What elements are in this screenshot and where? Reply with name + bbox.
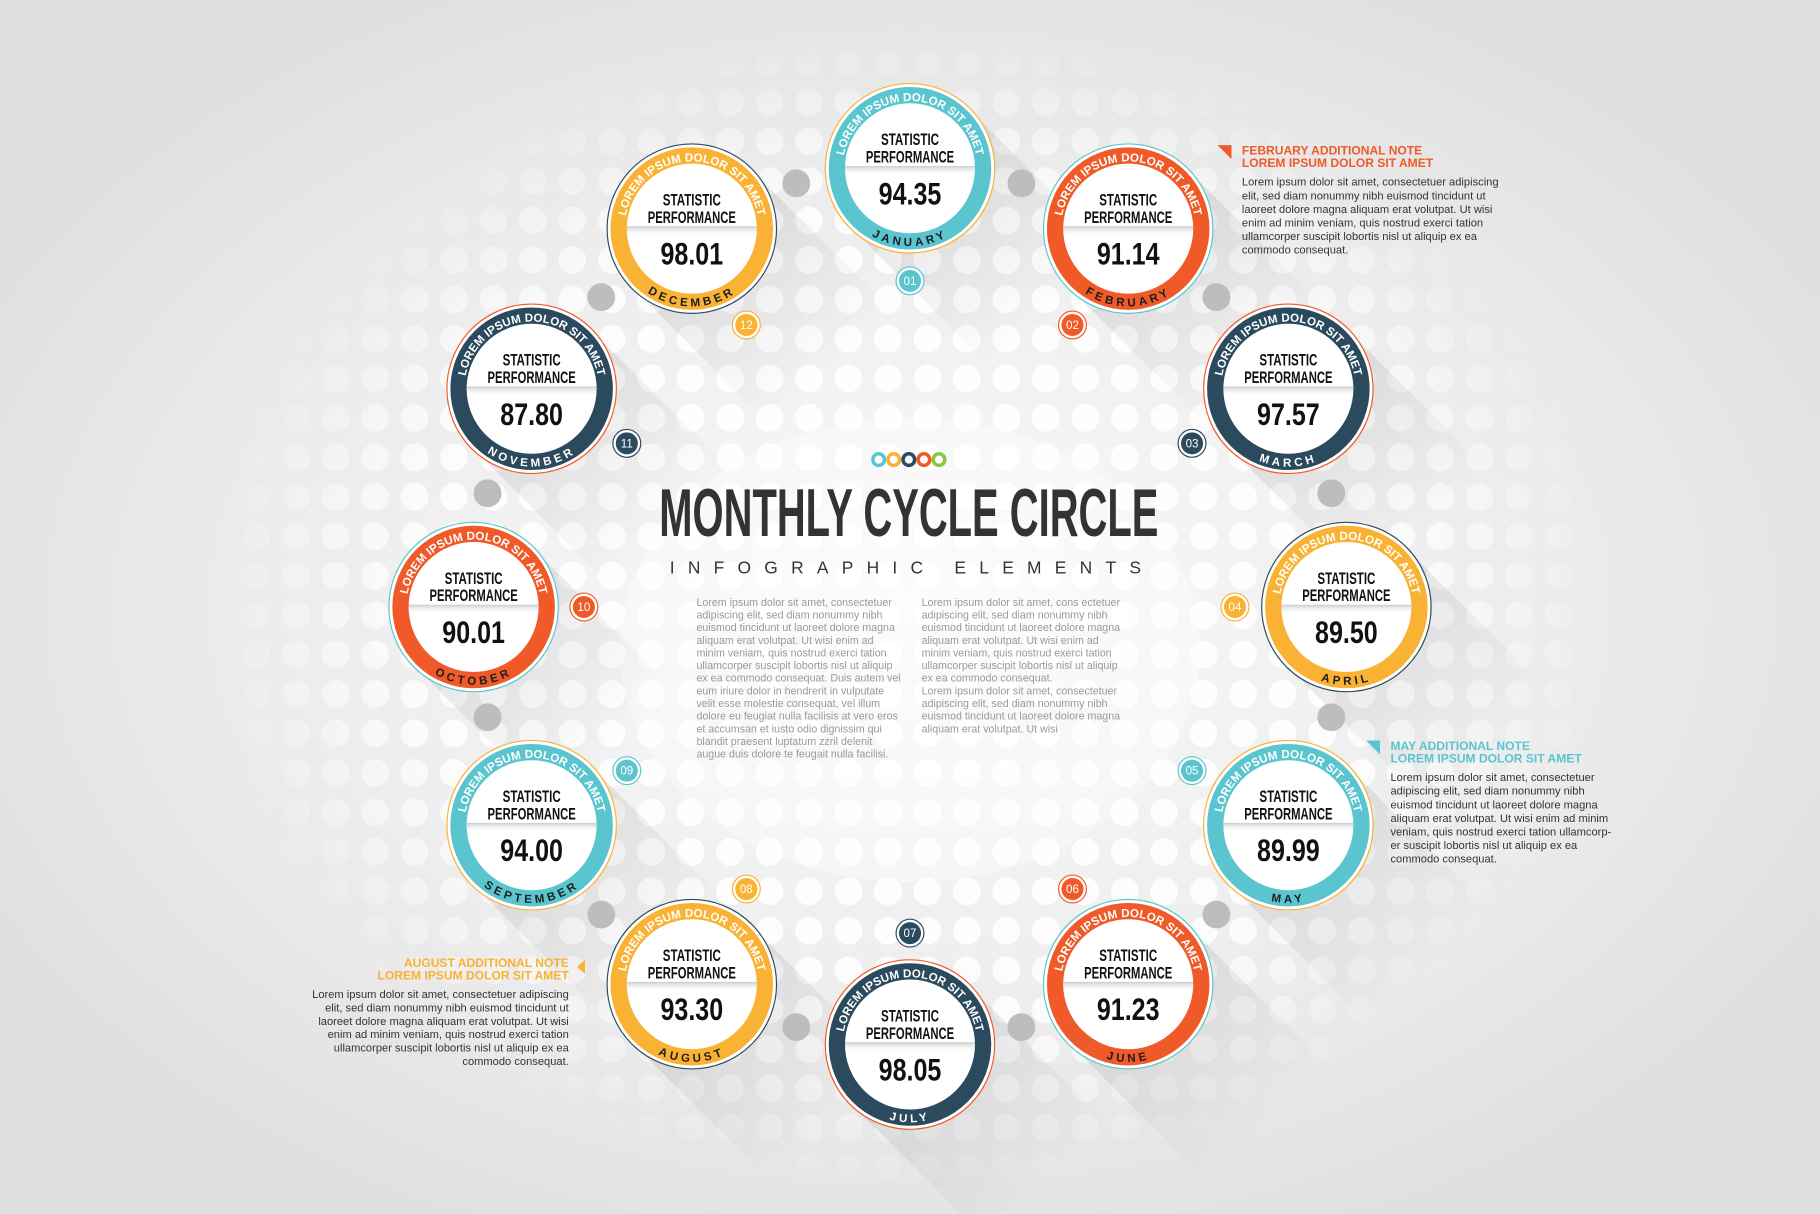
body text: left column: augue duis dolore te feugait nulla facilisi. [696, 749, 888, 761]
note: August [312, 956, 585, 1068]
note: February: FEBRUARY ADDITIONAL NOTE [1242, 143, 1422, 157]
circle: March: PERFORMANCE [1244, 369, 1333, 387]
circle: April: 89.50 [1315, 615, 1378, 650]
body text: right column: aliquam erat volutpat. Ut wisi [922, 723, 1058, 735]
body text: left column: ex ea commodo consequat. Duis autem vel [696, 673, 901, 685]
note: February: enim ad minim veniam, quis nostrud exerci tation [1242, 217, 1483, 229]
note: February: Lorem ipsum dolor sit amet, consectetuer adipiscing [1242, 177, 1499, 189]
note: May: aliquam erat volutpat. Ut wisi enim ad minim [1390, 813, 1608, 825]
circle: July: LOREM IPSUM DOLOR SIT AMET [836, 969, 984, 1032]
circle: September: STATISTIC [503, 788, 561, 806]
body text: left column: blandit praesent luptatum zzril delenit [696, 736, 872, 748]
body text: left column: euismod tincidunt ut laoreet dolore magna [696, 622, 895, 634]
circle: September [446, 740, 617, 910]
circle: September: SEPTEMBER [484, 881, 577, 903]
circle: May [1203, 740, 1374, 910]
circle: June: PERFORMANCE [1084, 964, 1172, 982]
note: May: MAY ADDITIONAL NOTE [1390, 739, 1530, 753]
circle: July: STATISTIC [881, 1007, 939, 1025]
circle: July: PERFORMANCE [866, 1025, 954, 1043]
body text: left column: velit esse molestie consequat, vel illum [696, 698, 880, 710]
note: August: enim ad minim veniam, quis nostrud exerci tation [328, 1029, 569, 1041]
note: February [1218, 143, 1499, 257]
body text: left column: eum iriure dolor in hendrerit in vulputate [696, 685, 884, 697]
circle: January: 94.35 [879, 176, 941, 211]
circle: March [1203, 304, 1374, 474]
circle: March: STATISTIC [1259, 352, 1318, 370]
circle: November: STATISTIC [503, 352, 561, 370]
note: May: LOREM IPSUM DOLOR SIT AMET [1390, 752, 1582, 766]
circle: August: PERFORMANCE [648, 964, 736, 982]
body text: right column: Lorem ipsum dolor sit amet, consectetuer [922, 685, 1118, 697]
circle: July: 98.05 [879, 1053, 941, 1088]
circle: June [1042, 898, 1214, 1070]
body text: left column: ullamcorper suscipit lobortis nisl ut aliquip [696, 660, 893, 672]
body text: left column: minim veniam, quis nostrud exerci tation [696, 647, 887, 659]
circle: June: JUNE [1106, 1052, 1146, 1062]
circle: August: AUGUST [658, 1048, 720, 1062]
number badges: 10 [577, 601, 590, 614]
circle: April: LOREM IPSUM DOLOR SIT AMET [1272, 532, 1420, 594]
gray connector dots [474, 169, 1345, 1041]
note: February: laoreet dolore magna aliquam erat volutpat. Ut wisi [1242, 204, 1492, 216]
note: February: LOREM IPSUM DOLOR SIT AMET [1242, 156, 1434, 170]
circle: January: LOREM IPSUM DOLOR SIT AMET [836, 93, 984, 155]
circle: June: STATISTIC [1099, 947, 1157, 965]
body text: right column: ullamcorper suscipit lobortis nisl ut aliquip [922, 660, 1118, 672]
number badges: 12 [740, 319, 753, 332]
note: August: AUGUST ADDITIONAL NOTE [404, 956, 569, 970]
circle: March: MARCH [1260, 454, 1314, 467]
circle: January: JANUARY [872, 230, 942, 246]
body text: left column: dolore eu feugiat nulla facilisis at vero eros [696, 711, 898, 723]
note: May: veniam, quis nostrud exerci tation ullamcorp- [1390, 826, 1612, 838]
circle: October: 90.01 [442, 615, 505, 650]
number badges: 11 [621, 437, 633, 450]
number badges: 02 [1066, 319, 1079, 332]
subtitle: INFOGRAPHIC ELEMENTS [670, 557, 1141, 577]
body text: right column: aliquam erat volutpat. Ut wisi enim ad [922, 635, 1099, 647]
circle: November: LOREM IPSUM DOLOR SIT AMET [458, 314, 606, 376]
body text: right column: ex ea commodo consequat. [922, 673, 1053, 685]
circle: October: STATISTIC [445, 570, 503, 588]
circle: August: STATISTIC [663, 947, 721, 965]
circle: August: 93.30 [660, 992, 723, 1027]
number badges: 06 [1066, 883, 1079, 896]
circle: April: APRIL [1321, 674, 1368, 685]
body text: right column: euismod tincidunt ut laoreet dolore magna [922, 622, 1120, 634]
note: May: er suscipit lobortis nisl ut aliquip ex ea [1390, 840, 1578, 852]
circle: January: STATISTIC [881, 131, 939, 149]
circle: September: LOREM IPSUM DOLOR SIT AMET [458, 750, 606, 812]
number badges: 03 [1186, 437, 1198, 450]
note: May [1366, 739, 1612, 866]
body text: right column: adipiscing elit, sed diam nonummy nibh [922, 609, 1108, 621]
circle: October: OCTOBER [436, 668, 510, 685]
circle: November: 87.80 [500, 397, 563, 432]
circle: July: JULY [890, 1112, 926, 1122]
circle: October: PERFORMANCE [430, 587, 518, 605]
circle: September: 94.00 [500, 833, 563, 868]
body text: right column: euismod tincidunt ut laoreet dolore magna [922, 711, 1120, 723]
circle: June: LOREM IPSUM DOLOR SIT AMET [1054, 909, 1202, 971]
note: February: ullamcorper suscipit lobortis nisl ut aliquip ex ea [1242, 231, 1478, 243]
circle: May: MAY [1272, 894, 1301, 903]
note: May: adipiscing elit, sed diam nonummy nibh [1390, 786, 1585, 798]
circle: June: 91.23 [1097, 992, 1160, 1027]
note: May: Lorem ipsum dolor sit amet, consectetuer [1390, 772, 1595, 784]
note: August: elit, sed diam nonummy nibh euismod tincidunt ut [325, 1002, 570, 1014]
number badges: 09 [620, 765, 633, 778]
body text: left column: et accumsan et iusto odio dignissim qui [696, 723, 882, 735]
note: May: commodo consequat. [1390, 854, 1497, 866]
circle: January [824, 83, 996, 254]
number badges: 05 [1186, 765, 1198, 778]
body text: right column: adipiscing elit, sed diam nonummy nibh [922, 698, 1108, 710]
title: MONTHLY CYCLE CIRCLE [659, 476, 1158, 551]
note: February: commodo consequat. [1242, 245, 1348, 257]
note: May: euismod tincidunt ut laoreet dolore magna [1390, 799, 1598, 811]
note: August: Lorem ipsum dolor sit amet, consectetuer adipiscing [312, 989, 569, 1001]
circle: April: PERFORMANCE [1302, 587, 1391, 605]
circle: February: LOREM IPSUM DOLOR SIT AMET [1054, 153, 1202, 216]
circle: May: LOREM IPSUM DOLOR SIT AMET [1214, 750, 1362, 812]
body text: left column: Lorem ipsum dolor sit amet, consectetuer [696, 597, 892, 609]
circle: February [1042, 143, 1214, 314]
circle: December: 98.01 [660, 237, 723, 272]
note: August: ullamcorper suscipit lobortis nisl ut aliquip ex ea [334, 1043, 570, 1055]
circle: February: 91.14 [1097, 237, 1160, 272]
circle: October [388, 522, 559, 692]
number badges: 07 [904, 927, 916, 940]
note: August: laoreet dolore magna aliquam erat volutpat. Ut wisi [318, 1016, 569, 1028]
circle: April [1261, 522, 1432, 692]
circle: February: PERFORMANCE [1084, 209, 1172, 227]
note: August: LOREM IPSUM DOLOR SIT AMET [378, 969, 569, 983]
circle: November [446, 304, 617, 474]
circle: December [606, 143, 778, 314]
circle: November: NOVEMBER [488, 446, 574, 467]
circle: May: 89.99 [1257, 833, 1320, 868]
circle: May: STATISTIC [1259, 788, 1318, 806]
body text: left column: adipiscing elit, sed diam nonummy nibh [696, 609, 883, 621]
circle: February: STATISTIC [1099, 191, 1157, 209]
circle: December: DECEMBER [648, 286, 733, 307]
number badges [570, 267, 1249, 947]
number badges: 08 [740, 883, 753, 896]
circle: January: PERFORMANCE [866, 148, 954, 166]
circle: July [824, 959, 996, 1130]
icon: five colored rings [873, 454, 945, 465]
body text: right column: minim veniam, quis nostrud exerci tation [922, 647, 1112, 659]
long shadows [415, 109, 1545, 1214]
circle: December: PERFORMANCE [648, 209, 736, 227]
circle: November: PERFORMANCE [488, 369, 576, 387]
circle: May: PERFORMANCE [1244, 805, 1333, 823]
circle: March: 97.57 [1257, 397, 1320, 432]
body text: right column: Lorem ipsum dolor sit amet, cons ectetuer [922, 597, 1120, 609]
number badges: 04 [1229, 601, 1242, 614]
circle: April: STATISTIC [1317, 570, 1376, 588]
number badges: 01 [904, 275, 916, 288]
note: August: commodo consequat. [462, 1056, 569, 1068]
circle: December: STATISTIC [663, 191, 721, 209]
circle: October: LOREM IPSUM DOLOR SIT AMET [400, 532, 548, 594]
body text: left column: aliquam erat volutpat. Ut wisi enim ad [696, 635, 874, 647]
note: February: elit, sed diam nonummy nibh euismod tincidunt ut [1242, 190, 1486, 202]
circle: February: FEBRUARY [1086, 286, 1166, 306]
circle: December: LOREM IPSUM DOLOR SIT AMET [618, 153, 766, 216]
circle: September: PERFORMANCE [488, 805, 576, 823]
circle: August: LOREM IPSUM DOLOR SIT AMET [618, 909, 766, 971]
circle: August [606, 898, 778, 1070]
circle: March: LOREM IPSUM DOLOR SIT AMET [1214, 314, 1362, 376]
